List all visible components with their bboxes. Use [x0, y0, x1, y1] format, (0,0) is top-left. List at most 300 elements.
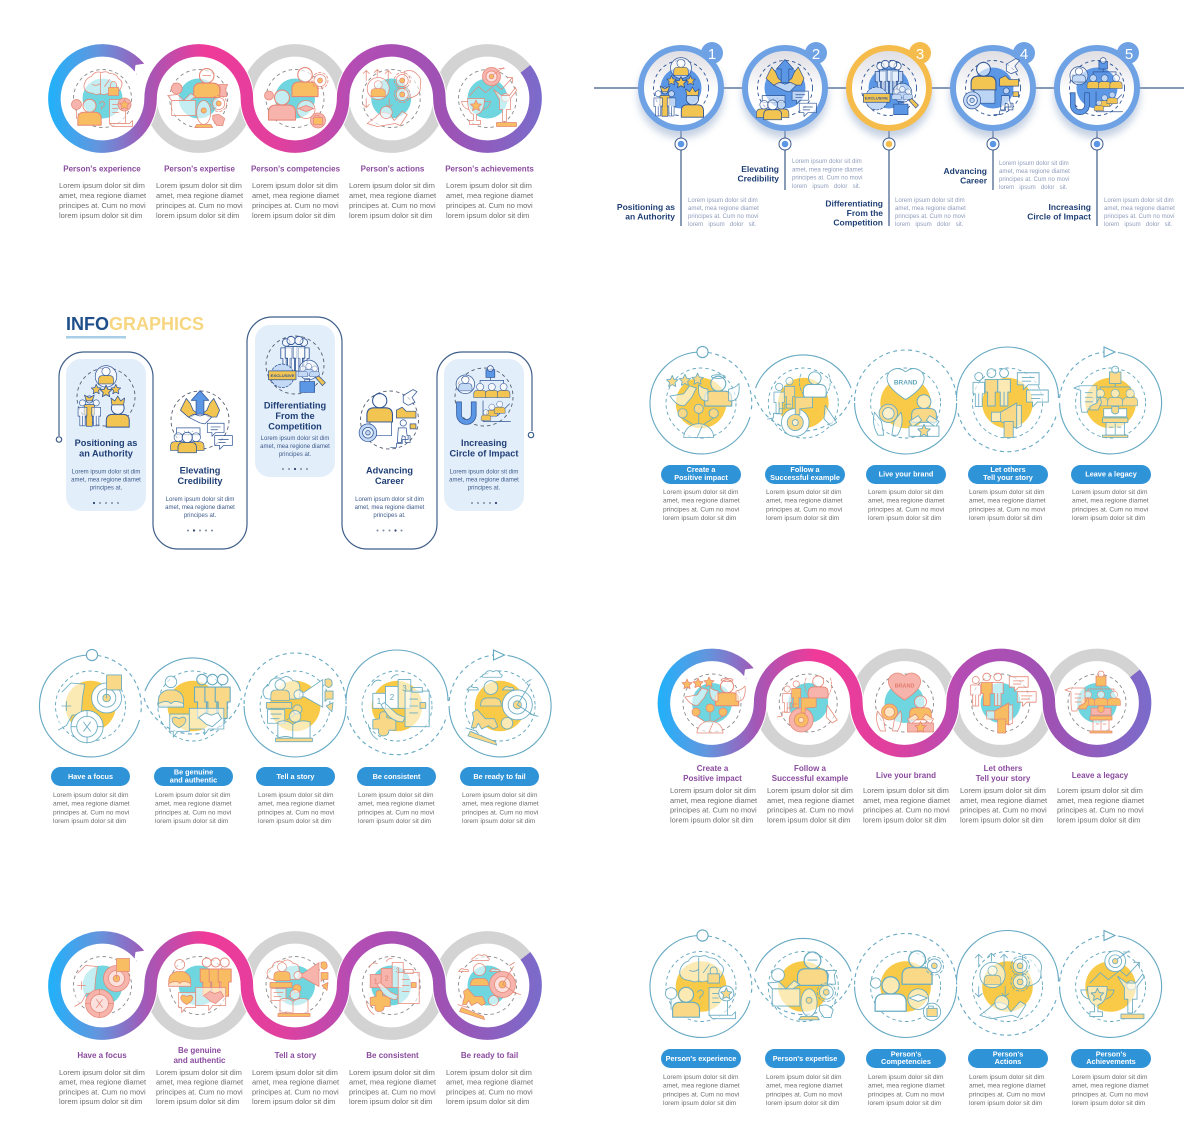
step 4: person's actions: Lorem ipsum dolor sit dim — [969, 1074, 1045, 1081]
step 2: Elevating — [741, 164, 779, 174]
column 1 text — [59, 164, 147, 220]
step 5: leave a legacy: Lorem ipsum dolor sit dim — [1072, 489, 1148, 496]
step 1: person's experience: Person's experience — [666, 1054, 736, 1063]
step 2: be genuine and authentic: principes at. Cum no movi — [155, 809, 232, 816]
step 4: be consistent: Lorem ipsum dolor sit dim — [358, 792, 434, 799]
column 3 text: Lorem ipsum dolor sit dim — [252, 181, 338, 190]
column 2 text: Lorem ipsum dolor sit dim — [156, 181, 242, 190]
heading: INFOGRAPHICS: INFOGRAPHICS — [66, 314, 204, 334]
step 4: be consistent: amet, mea regione diamet — [358, 801, 435, 808]
column 3 text: lorem ipsum dolor sit dim — [863, 815, 946, 824]
step 5: person's achievements — [1071, 951, 1151, 1107]
tab 4 — [355, 390, 425, 532]
tab 3: principes at. — [279, 452, 312, 458]
step 4: 4 — [1020, 46, 1028, 63]
column 4 text: amet, mea regione diamet — [349, 191, 437, 200]
column 2 text: Be genuine — [178, 1046, 222, 1055]
step 3: tell a story — [256, 671, 335, 825]
panel: qualities rings with pills — [650, 930, 1162, 1107]
icon: person's competencies — [264, 68, 328, 128]
column 1 text: principes at. Cum no movi — [670, 806, 757, 815]
step 2: lorem ipsum dolor sit. — [792, 183, 861, 190]
step 5: person's achievements: Person's — [1096, 1050, 1126, 1058]
step 3: From the — [847, 208, 883, 218]
column 4 text: principes at. Cum no movi — [349, 201, 436, 210]
panel: impact rings with pills — [650, 346, 1162, 522]
step 3: live your brand: BRAND — [894, 380, 918, 386]
tab 3: Differentiating — [264, 400, 326, 410]
tab 1: principes at. — [90, 486, 123, 492]
column 4 text: principes at. Cum no movi — [349, 1087, 436, 1096]
column 4 text: Be consistent — [366, 1051, 419, 1060]
tab 1: Positioning as — [75, 438, 137, 448]
icon: be genuine — [169, 956, 231, 1014]
step 1: lorem ipsum dolor sit. — [688, 221, 757, 228]
column 1 text: amet, mea regione diamet — [670, 796, 758, 805]
step 5: be ready to fail: Be ready to fail — [473, 772, 526, 781]
step 5: Lorem ipsum dolor sit dim — [1104, 197, 1174, 204]
step 3: live your brand: lorem ipsum dolor sit dim — [868, 515, 942, 522]
step 2: follow a successful example: Follow a — [790, 465, 821, 474]
step 1: have a focus: lorem ipsum dolor sit dim — [53, 818, 127, 825]
step 1: have a focus: Lorem ipsum dolor sit dim — [53, 792, 129, 799]
step 3 — [825, 42, 966, 228]
step 3: live your brand: amet, mea regione diamet — [868, 498, 945, 505]
tab 2: principes at. — [184, 513, 217, 519]
column 2 text — [156, 1046, 244, 1106]
column 4 text: Tell your story — [976, 774, 1031, 783]
step 5: person's achievements: lorem ipsum dolor sit dim — [1072, 1100, 1146, 1107]
step 5: lorem ipsum dolor sit. — [1104, 221, 1173, 228]
snake outline — [56, 317, 534, 549]
step 2: person's expertise — [765, 952, 845, 1107]
step 4: Advancing — [944, 166, 987, 176]
step 1: an Authority — [625, 212, 675, 222]
column 5 text: amet, mea regione diamet — [446, 1078, 534, 1087]
step 1: Positioning as — [617, 202, 675, 212]
step 5: be ready to fail: amet, mea regione diamet — [462, 801, 539, 808]
column 5 text: Lorem ipsum dolor sit dim — [446, 1068, 532, 1077]
step 2: be genuine and authentic: lorem ipsum dolor sit dim — [155, 818, 229, 825]
column 5 text: principes at. Cum no movi — [446, 201, 533, 210]
column 3 text: principes at. Cum no movi — [252, 1087, 339, 1096]
ribbon wave — [54, 50, 536, 147]
step 4: Lorem ipsum dolor sit dim — [999, 160, 1069, 167]
column 1 text: lorem ipsum dolor sit dim — [59, 1097, 142, 1106]
step 2: amet, mea regione diamet — [792, 166, 863, 173]
column 2 text: amet, mea regione diamet — [156, 1078, 244, 1087]
icon: positive impact — [682, 674, 745, 733]
step 3: person's competencies — [866, 951, 946, 1107]
step 2: be genuine and authentic — [154, 671, 233, 825]
column 1 text: Create a — [697, 764, 729, 773]
step 5: Increasing — [1048, 202, 1091, 212]
step 3: Lorem ipsum dolor sit dim — [895, 197, 965, 204]
tab 2: amet, mea regione diamet — [165, 505, 235, 511]
column 5 text: principes at. Cum no movi — [1057, 806, 1144, 815]
step 3: person's competencies: lorem ipsum dolor sit dim — [868, 1100, 942, 1107]
column 4 text — [349, 1051, 437, 1106]
column 3 text: amet, mea regione diamet — [252, 191, 340, 200]
step 3: lorem ipsum dolor sit. — [895, 221, 964, 228]
tab 3: From the — [275, 411, 315, 421]
tab 3: Lorem ipsum dolor sit dim — [261, 436, 329, 442]
step 1: create a positive impact: Positive impact — [674, 473, 728, 482]
tab 2: Credibility — [178, 476, 223, 486]
column 2 text: Successful example — [772, 774, 849, 783]
step 3: person's competencies: Person's — [891, 1050, 921, 1058]
step 4: person's actions: principes at. Cum no movi — [969, 1091, 1046, 1098]
column 3 text: Live your brand — [876, 771, 936, 780]
step 5: be ready to fail: lorem ipsum dolor sit dim — [462, 818, 536, 825]
step 4: person's actions — [968, 952, 1048, 1107]
column 3 text: Lorem ipsum dolor sit dim — [252, 1068, 338, 1077]
step 5: leave a legacy: principes at. Cum no movi — [1072, 506, 1149, 513]
step 4: let others tell your story: Let others — [990, 465, 1026, 474]
step 5: person's achievements: principes at. Cum no movi — [1072, 1091, 1149, 1098]
panel: focus rings with pills — [39, 649, 551, 825]
tab 1: an Authority — [79, 448, 134, 458]
icon: have a focus — [74, 956, 132, 1018]
column 4 text: Lorem ipsum dolor sit dim — [960, 786, 1046, 795]
linked rings — [39, 649, 551, 757]
icon: leave a legacy — [1065, 671, 1126, 733]
step 1: create a positive impact: lorem ipsum dolor sit dim — [663, 515, 737, 522]
column 4 text: Lorem ipsum dolor sit dim — [349, 181, 435, 190]
step 5: person's achievements: Achievements — [1086, 1057, 1136, 1066]
step 4: be consistent: 2 — [390, 693, 395, 702]
tab 4: Lorem ipsum dolor sit dim — [355, 497, 424, 503]
step 1: principes at. Cum no movi — [688, 213, 758, 220]
step 4: let others tell your story: Lorem ipsum dolor sit dim — [969, 489, 1045, 496]
step 4: lorem ipsum dolor sit. — [999, 184, 1068, 191]
timeline axis — [594, 87, 1184, 89]
step 2: person's expertise: lorem ipsum dolor sit dim — [766, 1100, 840, 1107]
step 5: person's achievements: Lorem ipsum dolor sit dim — [1072, 1074, 1148, 1081]
column 5 text: Lorem ipsum dolor sit dim — [446, 181, 532, 190]
tab 4: amet, mea regione diamet — [355, 505, 425, 511]
step 1: create a positive impact: amet, mea regione diamet — [663, 498, 740, 505]
step 2: person's expertise: amet, mea regione diamet — [766, 1083, 843, 1090]
icon: be consistent: 2 — [385, 976, 389, 982]
step 2: person's expertise: Person's expertise — [773, 1054, 837, 1063]
step 3: tell a story: amet, mea regione diamet — [258, 801, 335, 808]
icon: be consistent: 3 — [396, 968, 400, 974]
step 5: be ready to fail — [460, 671, 539, 825]
step 3: Competition — [833, 218, 883, 228]
column 3 text: principes at. Cum no movi — [863, 806, 950, 815]
step 1: person's experience: Lorem ipsum dolor sit dim — [663, 1074, 739, 1081]
column 3 text: lorem ipsum dolor sit dim — [252, 1097, 335, 1106]
tab 5: principes at. — [468, 486, 501, 492]
tab 3: EXCLUSIVE — [270, 373, 295, 378]
panel: infographics rounded tabs — [56, 314, 534, 549]
tab 1: amet, mea regione diamet — [71, 478, 141, 484]
step 2: follow a successful example: amet, mea regione diamet — [766, 498, 843, 505]
column 4 text: lorem ipsum dolor sit dim — [960, 815, 1043, 824]
step 2: principes at. Cum no movi — [792, 175, 862, 182]
column 4 text: lorem ipsum dolor sit dim — [349, 1097, 432, 1106]
column 2 text: lorem ipsum dolor sit dim — [156, 1097, 239, 1106]
column 5 text: amet, mea regione diamet — [446, 191, 534, 200]
tab 5: amet, mea regione diamet — [449, 478, 519, 484]
step 4: be consistent: lorem ipsum dolor sit dim — [358, 818, 432, 825]
column 1 text — [59, 1051, 147, 1106]
column 2 text: principes at. Cum no movi — [156, 1087, 243, 1096]
icon: tell your story — [971, 673, 1036, 733]
step 3: amet, mea regione diamet — [895, 205, 966, 212]
linked rings — [650, 930, 1162, 1038]
step 2: follow a successful example: Successful example — [770, 473, 840, 482]
column 4 text: lorem ipsum dolor sit dim — [349, 211, 432, 220]
linked rings — [650, 346, 1162, 454]
panel: person's qualities ribbon — [54, 50, 536, 220]
step 4: principes at. Cum no movi — [999, 176, 1069, 183]
icon: person's achievements — [458, 68, 516, 128]
step 1 — [617, 42, 759, 228]
column 3 text: principes at. Cum no movi — [252, 201, 339, 210]
step 4: let others tell your story: amet, mea regione diamet — [969, 498, 1046, 505]
step 4: let others tell your story — [968, 368, 1048, 522]
step 1: person's experience — [661, 952, 741, 1107]
step 4: person's actions: lorem ipsum dolor sit dim — [969, 1100, 1043, 1107]
column 4 text: principes at. Cum no movi — [960, 806, 1047, 815]
column 3 text: lorem ipsum dolor sit dim — [252, 211, 335, 220]
column 3 text — [863, 771, 951, 824]
tab 3 — [255, 325, 335, 477]
ribbon wave — [54, 937, 536, 1034]
column 2 text: lorem ipsum dolor sit dim — [767, 815, 850, 824]
column 1 text: Lorem ipsum dolor sit dim — [59, 1068, 145, 1077]
step 1: person's experience: amet, mea regione diamet — [663, 1083, 740, 1090]
step 3: EXCLUSIVE — [865, 96, 888, 100]
step 5: be ready to fail: Lorem ipsum dolor sit dim — [462, 792, 538, 799]
icon: tell a story — [266, 956, 328, 1016]
ribbon wave — [664, 655, 1145, 751]
column 2 text: amet, mea regione diamet — [767, 796, 855, 805]
step 3: tell a story: Tell a story — [277, 772, 315, 781]
step 4: person's actions: Actions — [995, 1057, 1021, 1066]
tab 2: Elevating — [180, 466, 220, 476]
column 4 text: Person's actions — [361, 164, 425, 174]
step 5: leave a legacy: Leave a legacy — [1085, 470, 1138, 478]
column 4 text: amet, mea regione diamet — [349, 1078, 437, 1087]
icon: be consistent: 1 — [374, 978, 378, 986]
tab 3: amet, mea regione diamet — [260, 444, 330, 450]
column 1 text: principes at. Cum no movi — [59, 1087, 146, 1096]
tab 5: Increasing — [461, 438, 507, 448]
step 1: 1 — [708, 46, 716, 63]
column 5 text: lorem ipsum dolor sit dim — [446, 211, 529, 220]
step 2 — [737, 42, 863, 190]
step 5: person's achievements: amet, mea regione diamet — [1072, 1083, 1149, 1090]
column 3 text — [251, 164, 341, 220]
step 3: live your brand — [866, 368, 946, 522]
step 4: Career — [960, 176, 988, 186]
step 3: tell a story: lorem ipsum dolor sit dim — [258, 818, 332, 825]
step 1: create a positive impact: Lorem ipsum dolor sit dim — [663, 489, 739, 496]
step 2: be genuine and authentic: Be genuine — [174, 768, 213, 776]
step 1: create a positive impact: principes at. Cum no movi — [663, 506, 740, 513]
step 3: person's competencies: Competencies — [881, 1057, 931, 1066]
column 1 text: Have a focus — [77, 1051, 127, 1060]
column 5 text: lorem ipsum dolor sit dim — [446, 1097, 529, 1106]
column 1 text: amet, mea regione diamet — [59, 1078, 147, 1087]
column 5 text: principes at. Cum no movi — [446, 1087, 533, 1096]
step 2: follow a successful example: principes at. Cum no movi — [766, 506, 843, 513]
step 4: be consistent: principes at. Cum no movi — [358, 809, 435, 816]
panel: focus ribbon — [54, 937, 536, 1106]
step 2: follow a successful example: lorem ipsum dolor sit dim — [766, 515, 840, 522]
column 1 text: principes at. Cum no movi — [59, 201, 146, 210]
icon: be ready to fail — [458, 955, 520, 1020]
step 2: 2 — [812, 46, 820, 63]
column 1 text: lorem ipsum dolor sit dim — [59, 211, 142, 220]
step 2: follow a successful example: Lorem ipsum dolor sit dim — [766, 489, 842, 496]
tab 5: Circle of Impact — [450, 448, 518, 458]
column 3 text: Person's competencies — [251, 164, 341, 174]
column 2 text: Lorem ipsum dolor sit dim — [156, 1068, 242, 1077]
step 4: be consistent: 1 — [377, 697, 382, 706]
step 4: be consistent: Be consistent — [373, 772, 421, 781]
column 1 text: Person's experience — [63, 164, 141, 174]
column 5 text — [1057, 771, 1145, 824]
column 2 text — [156, 164, 244, 220]
column 2 text: amet, mea regione diamet — [156, 191, 244, 200]
step 5: Circle of Impact — [1027, 212, 1091, 222]
step 3: Differentiating — [825, 198, 883, 208]
column 1 text — [670, 764, 758, 824]
tab 2: Lorem ipsum dolor sit dim — [166, 497, 234, 503]
column 2 text: principes at. Cum no movi — [767, 806, 854, 815]
step 3: person's competencies: principes at. Cum no movi — [868, 1091, 945, 1098]
step 3: person's competencies: Lorem ipsum dolor sit dim — [868, 1074, 944, 1081]
icon: be consistent — [362, 956, 420, 1014]
step 2: be genuine and authentic: amet, mea regione diamet — [155, 801, 232, 808]
step 2: Credibility — [737, 174, 779, 184]
icon: live your brand: BRAND — [895, 684, 914, 690]
step 5: leave a legacy — [1071, 366, 1151, 522]
step 1: have a focus: Have a focus — [68, 772, 113, 781]
column 5 text — [446, 1051, 534, 1106]
step 2: person's expertise: Lorem ipsum dolor sit dim — [766, 1074, 842, 1081]
step 2: follow a successful example — [765, 368, 845, 522]
step 1: person's experience: lorem ipsum dolor sit dim — [663, 1100, 737, 1107]
icon: live your brand — [876, 673, 934, 732]
column 2 text: Person's expertise — [164, 164, 235, 174]
tab 4: Advancing — [366, 466, 413, 476]
column 1 text: lorem ipsum dolor sit dim — [670, 815, 753, 824]
step 3: live your brand: principes at. Cum no movi — [868, 506, 945, 513]
column 4 text — [960, 764, 1048, 824]
column 3 text: Tell a story — [275, 1051, 317, 1060]
column 3 text: amet, mea regione diamet — [252, 1078, 340, 1087]
step 4: let others tell your story: Tell your story — [983, 473, 1034, 482]
step 3: live your brand: Lorem ipsum dolor sit dim — [868, 489, 944, 496]
step 5: amet, mea regione diamet — [1104, 205, 1175, 212]
tab 4: principes at. — [373, 513, 406, 519]
step 2: person's expertise: principes at. Cum no movi — [766, 1091, 843, 1098]
column 4 text: Let others — [984, 764, 1023, 773]
column 5 text: Be ready to fail — [461, 1051, 518, 1060]
step 1: have a focus: principes at. Cum no movi — [53, 809, 130, 816]
column 2 text: Follow a — [794, 764, 827, 773]
column 5 text: Person's achievements — [445, 164, 534, 174]
step 1: person's experience: principes at. Cum no movi — [663, 1091, 740, 1098]
column 2 text: and authentic — [173, 1056, 226, 1065]
column 5 text — [445, 164, 534, 220]
column 2 text: Lorem ipsum dolor sit dim — [767, 786, 853, 795]
panel: impact ribbon — [664, 655, 1145, 824]
tab 4: Career — [375, 476, 404, 486]
step 2: be genuine and authentic: Lorem ipsum dolor sit dim — [155, 792, 231, 799]
tab 1 — [66, 359, 146, 511]
step 3: tell a story: Lorem ipsum dolor sit dim — [258, 792, 334, 799]
step 3: tell a story: principes at. Cum no movi — [258, 809, 335, 816]
column 2 text: principes at. Cum no movi — [156, 201, 243, 210]
step 1: amet, mea regione diamet — [688, 205, 759, 212]
column 3 text — [252, 1051, 340, 1106]
column 3 text: amet, mea regione diamet — [863, 796, 951, 805]
step 3: principes at. Cum no movi — [895, 213, 965, 220]
icon: person's experience — [72, 70, 132, 128]
tab 2 — [165, 391, 235, 532]
step 5: be ready to fail: principes at. Cum no movi — [462, 809, 539, 816]
column 5 text: amet, mea regione diamet — [1057, 796, 1145, 805]
column 4 text: Lorem ipsum dolor sit dim — [349, 1068, 435, 1077]
step 4: person's actions: amet, mea regione diamet — [969, 1083, 1046, 1090]
step 1: create a positive impact — [661, 368, 741, 522]
column 2 text: lorem ipsum dolor sit dim — [156, 211, 239, 220]
column 5 text: Leave a legacy — [1072, 771, 1129, 780]
step 1: have a focus: amet, mea regione diamet — [53, 801, 130, 808]
tab 1: Lorem ipsum dolor sit dim — [72, 470, 140, 476]
step 4: be consistent — [357, 671, 436, 825]
tab 5 — [444, 359, 524, 511]
column 1 text: Positive impact — [683, 774, 742, 783]
step 1: create a positive impact: Create a — [687, 465, 716, 474]
column 3 text: Lorem ipsum dolor sit dim — [863, 786, 949, 795]
panel: authority timeline with numbered circles — [594, 42, 1184, 228]
step 5: leave a legacy: amet, mea regione diamet — [1072, 498, 1149, 505]
icon: person's actions — [362, 70, 421, 128]
step 4 — [944, 42, 1070, 191]
step 4: let others tell your story: lorem ipsum dolor sit dim — [969, 515, 1043, 522]
step 3: person's competencies: amet, mea regione diamet — [868, 1083, 945, 1090]
icon: successful example — [777, 674, 837, 732]
column 1 text: amet, mea regione diamet — [59, 191, 147, 200]
step 5: principes at. Cum no movi — [1104, 213, 1174, 220]
step 1: Lorem ipsum dolor sit dim — [688, 197, 758, 204]
step 4: person's actions: Person's — [993, 1050, 1023, 1058]
step 4: amet, mea regione diamet — [999, 168, 1070, 175]
step 4: let others tell your story: principes at. Cum no movi — [969, 506, 1046, 513]
step 5: leave a legacy: lorem ipsum dolor sit dim — [1072, 515, 1146, 522]
step 2: be genuine and authentic: and authentic — [170, 776, 217, 784]
step 5: 5 — [1125, 46, 1133, 63]
step 3: live your brand: Live your brand — [879, 470, 933, 478]
column 5 text: lorem ipsum dolor sit dim — [1057, 815, 1140, 824]
tab 3: Competition — [268, 422, 322, 432]
icon: person's expertise — [168, 69, 228, 128]
step 4: be consistent: 3 — [402, 684, 407, 693]
column 2 text — [767, 764, 855, 824]
step 5 — [1027, 42, 1175, 228]
column 4 text: amet, mea regione diamet — [960, 796, 1048, 805]
column 1 text: Lorem ipsum dolor sit dim — [670, 786, 756, 795]
column 1 text: Lorem ipsum dolor sit dim — [59, 181, 145, 190]
column 4 text — [349, 164, 437, 220]
